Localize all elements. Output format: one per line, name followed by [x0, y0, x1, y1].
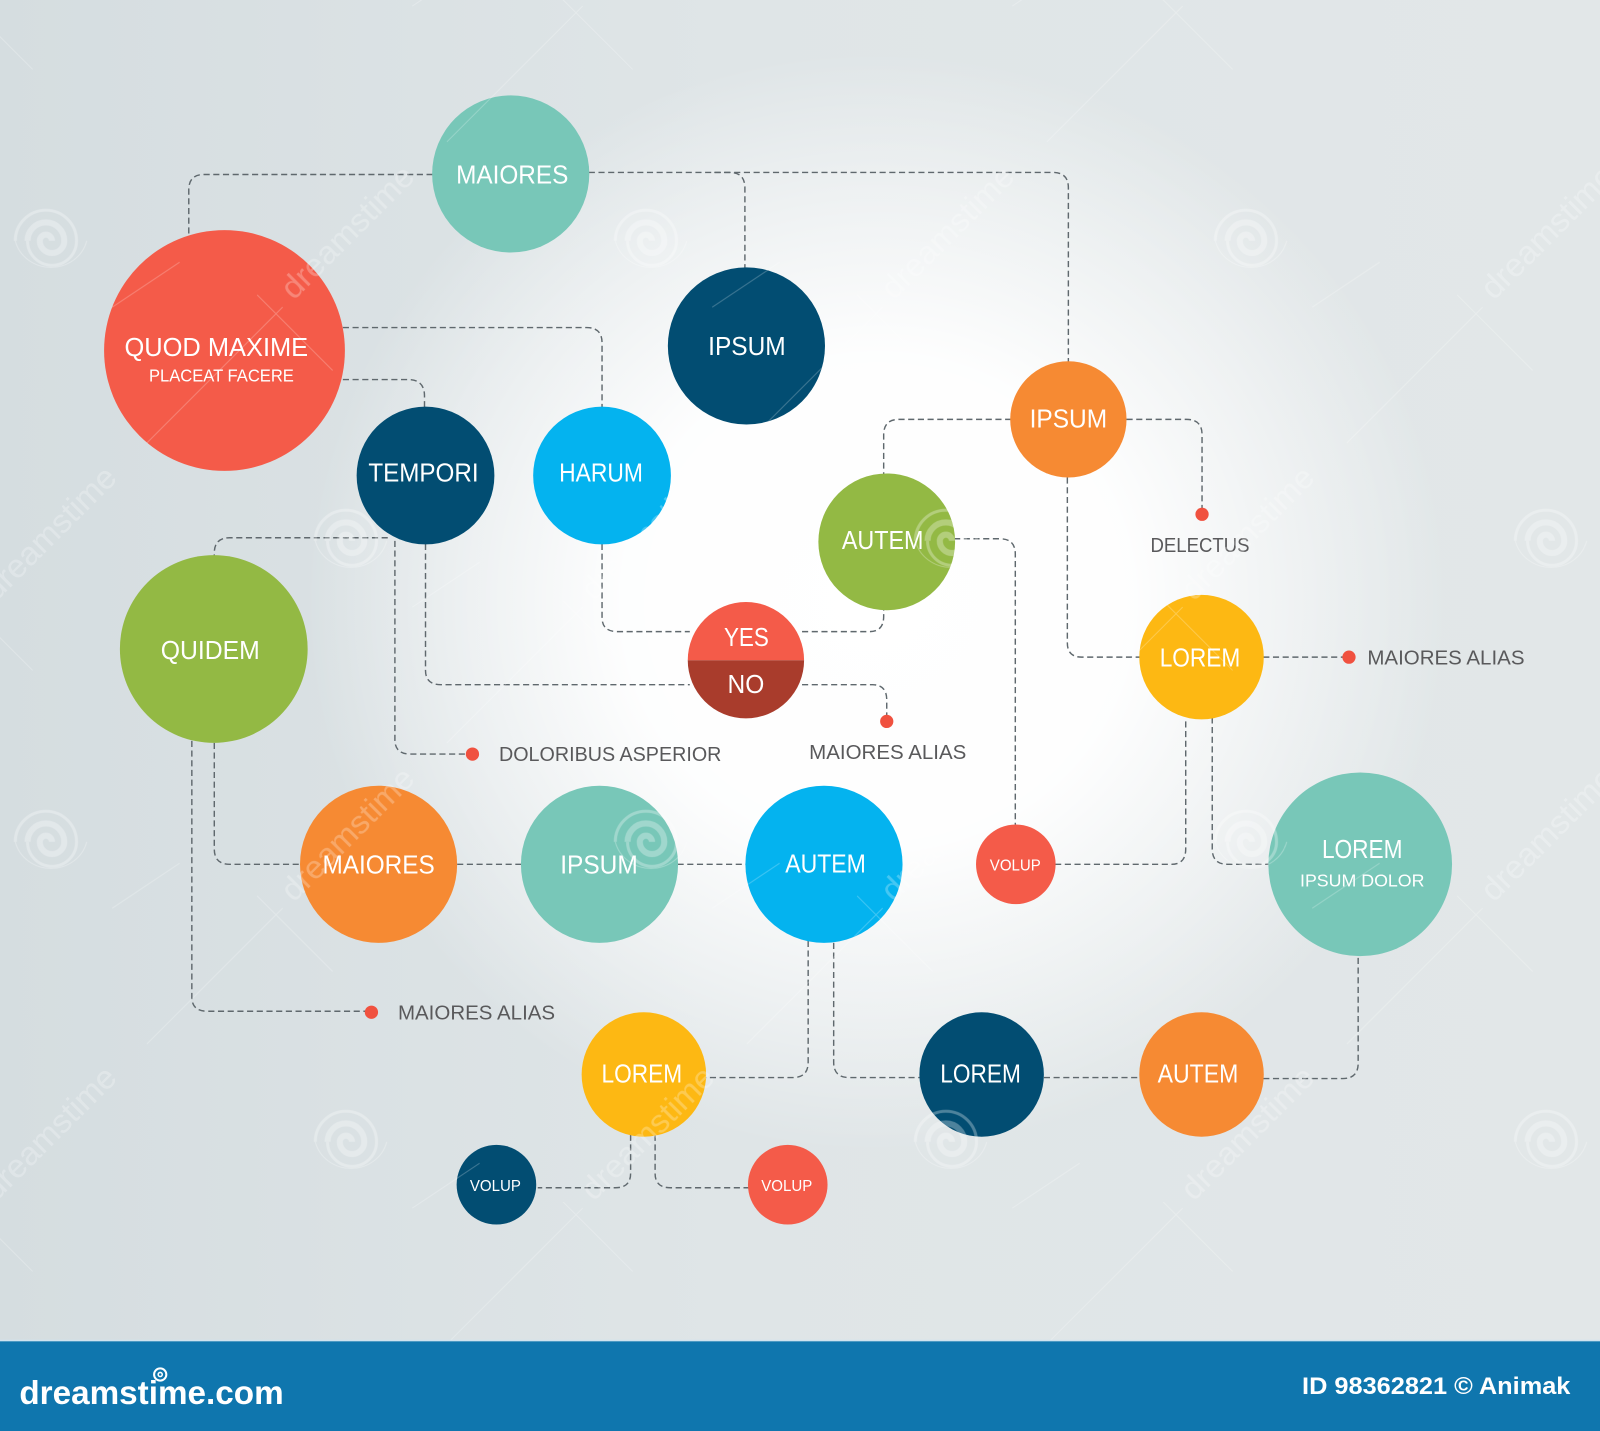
node: quod maxime: PLACEAT FACERE [149, 366, 294, 386]
label: maiores alias center: MAIORES ALIAS [809, 742, 966, 764]
node: lorem navy bottom: LOREM [940, 1061, 1021, 1089]
label: maiores alias left: MAIORES ALIAS [398, 1002, 555, 1024]
footer band [0, 1340, 1600, 1431]
connectors [189, 172, 1358, 1188]
node: autem green: AUTEM [842, 527, 923, 555]
node: volup red middle: VOLUP [990, 857, 1041, 874]
label: doloribus asperior: DOLORIBUS ASPERIOR [499, 744, 721, 766]
watermark text [0, 157, 1600, 1207]
watermark text: dreamstime [273, 157, 421, 306]
node: ipsum teal: IPSUM [560, 851, 638, 879]
node: autem orange bottom: AUTEM [1158, 1061, 1238, 1089]
label: maiores alias right: MAIORES ALIAS [1367, 647, 1524, 669]
node: autem orange bottom [1139, 1012, 1264, 1137]
watermark text: dreamstime [573, 1058, 721, 1207]
node: maiores top: MAIORES [456, 162, 568, 190]
node: yes / no decision: YES [724, 624, 769, 652]
node: harum: HARUM [559, 460, 643, 488]
watermark spirals [15, 210, 1587, 1168]
watermark text: dreamstime [1173, 1058, 1321, 1207]
node: harum [533, 407, 671, 544]
node: tempori: TEMPORI [368, 460, 479, 488]
node: volup red bottom [748, 1145, 828, 1224]
watermark text: dreamstime [573, 458, 721, 607]
node: autem blue: AUTEM [785, 850, 866, 878]
node: lorem yellow right [1139, 595, 1264, 719]
watermark text: dreamstime [873, 759, 1021, 908]
node: volup navy [457, 1145, 536, 1224]
node: ipsum teal [521, 786, 678, 943]
node: autem blue [745, 786, 903, 943]
node: maiores orange: MAIORES [322, 851, 435, 879]
watermark text: dreamstime [873, 157, 1021, 306]
node: quidem: QUIDEM [161, 637, 260, 665]
node: maiores orange [300, 786, 457, 943]
footer logo: dreamstime.com [19, 1375, 284, 1412]
footer credit: ID 98362821 © Animak [1302, 1373, 1571, 1400]
node: lorem yellow bottom [582, 1012, 706, 1137]
node: ipsum orange [1010, 361, 1127, 478]
node: volup red bottom: VOLUP [761, 1178, 812, 1195]
node: ipsum navy: IPSUM [708, 333, 786, 361]
node: lorem ipsum dolor: LOREM [1322, 836, 1403, 864]
node: lorem navy bottom [919, 1012, 1044, 1137]
node: maiores top [432, 95, 589, 253]
node: ipsum orange: IPSUM [1030, 406, 1107, 434]
node: yes / no decision: NO [728, 671, 764, 699]
label: maiores alias center [809, 715, 966, 764]
node: yes / no decision [688, 602, 804, 718]
node: volup red middle [976, 824, 1056, 904]
node: lorem ipsum dolor [1268, 772, 1452, 956]
node: volup navy: VOLUP [470, 1178, 521, 1195]
label: delectus [1151, 508, 1249, 557]
node: ipsum navy [668, 267, 825, 424]
node: lorem yellow bottom: LOREM [602, 1061, 682, 1089]
watermark text: dreamstime [1173, 458, 1321, 607]
node: lorem ipsum dolor: IPSUM DOLOR [1300, 871, 1424, 891]
node: quidem [120, 555, 308, 743]
node: lorem yellow right: LOREM [1160, 644, 1240, 672]
watermark text: dreamstime [273, 759, 421, 908]
label: delectus: DELECTUS [1151, 535, 1249, 557]
node: quod maxime [104, 230, 345, 471]
node: autem green [818, 473, 955, 610]
node: quod maxime: QUOD MAXIME [124, 334, 308, 362]
node: tempori [357, 407, 494, 544]
